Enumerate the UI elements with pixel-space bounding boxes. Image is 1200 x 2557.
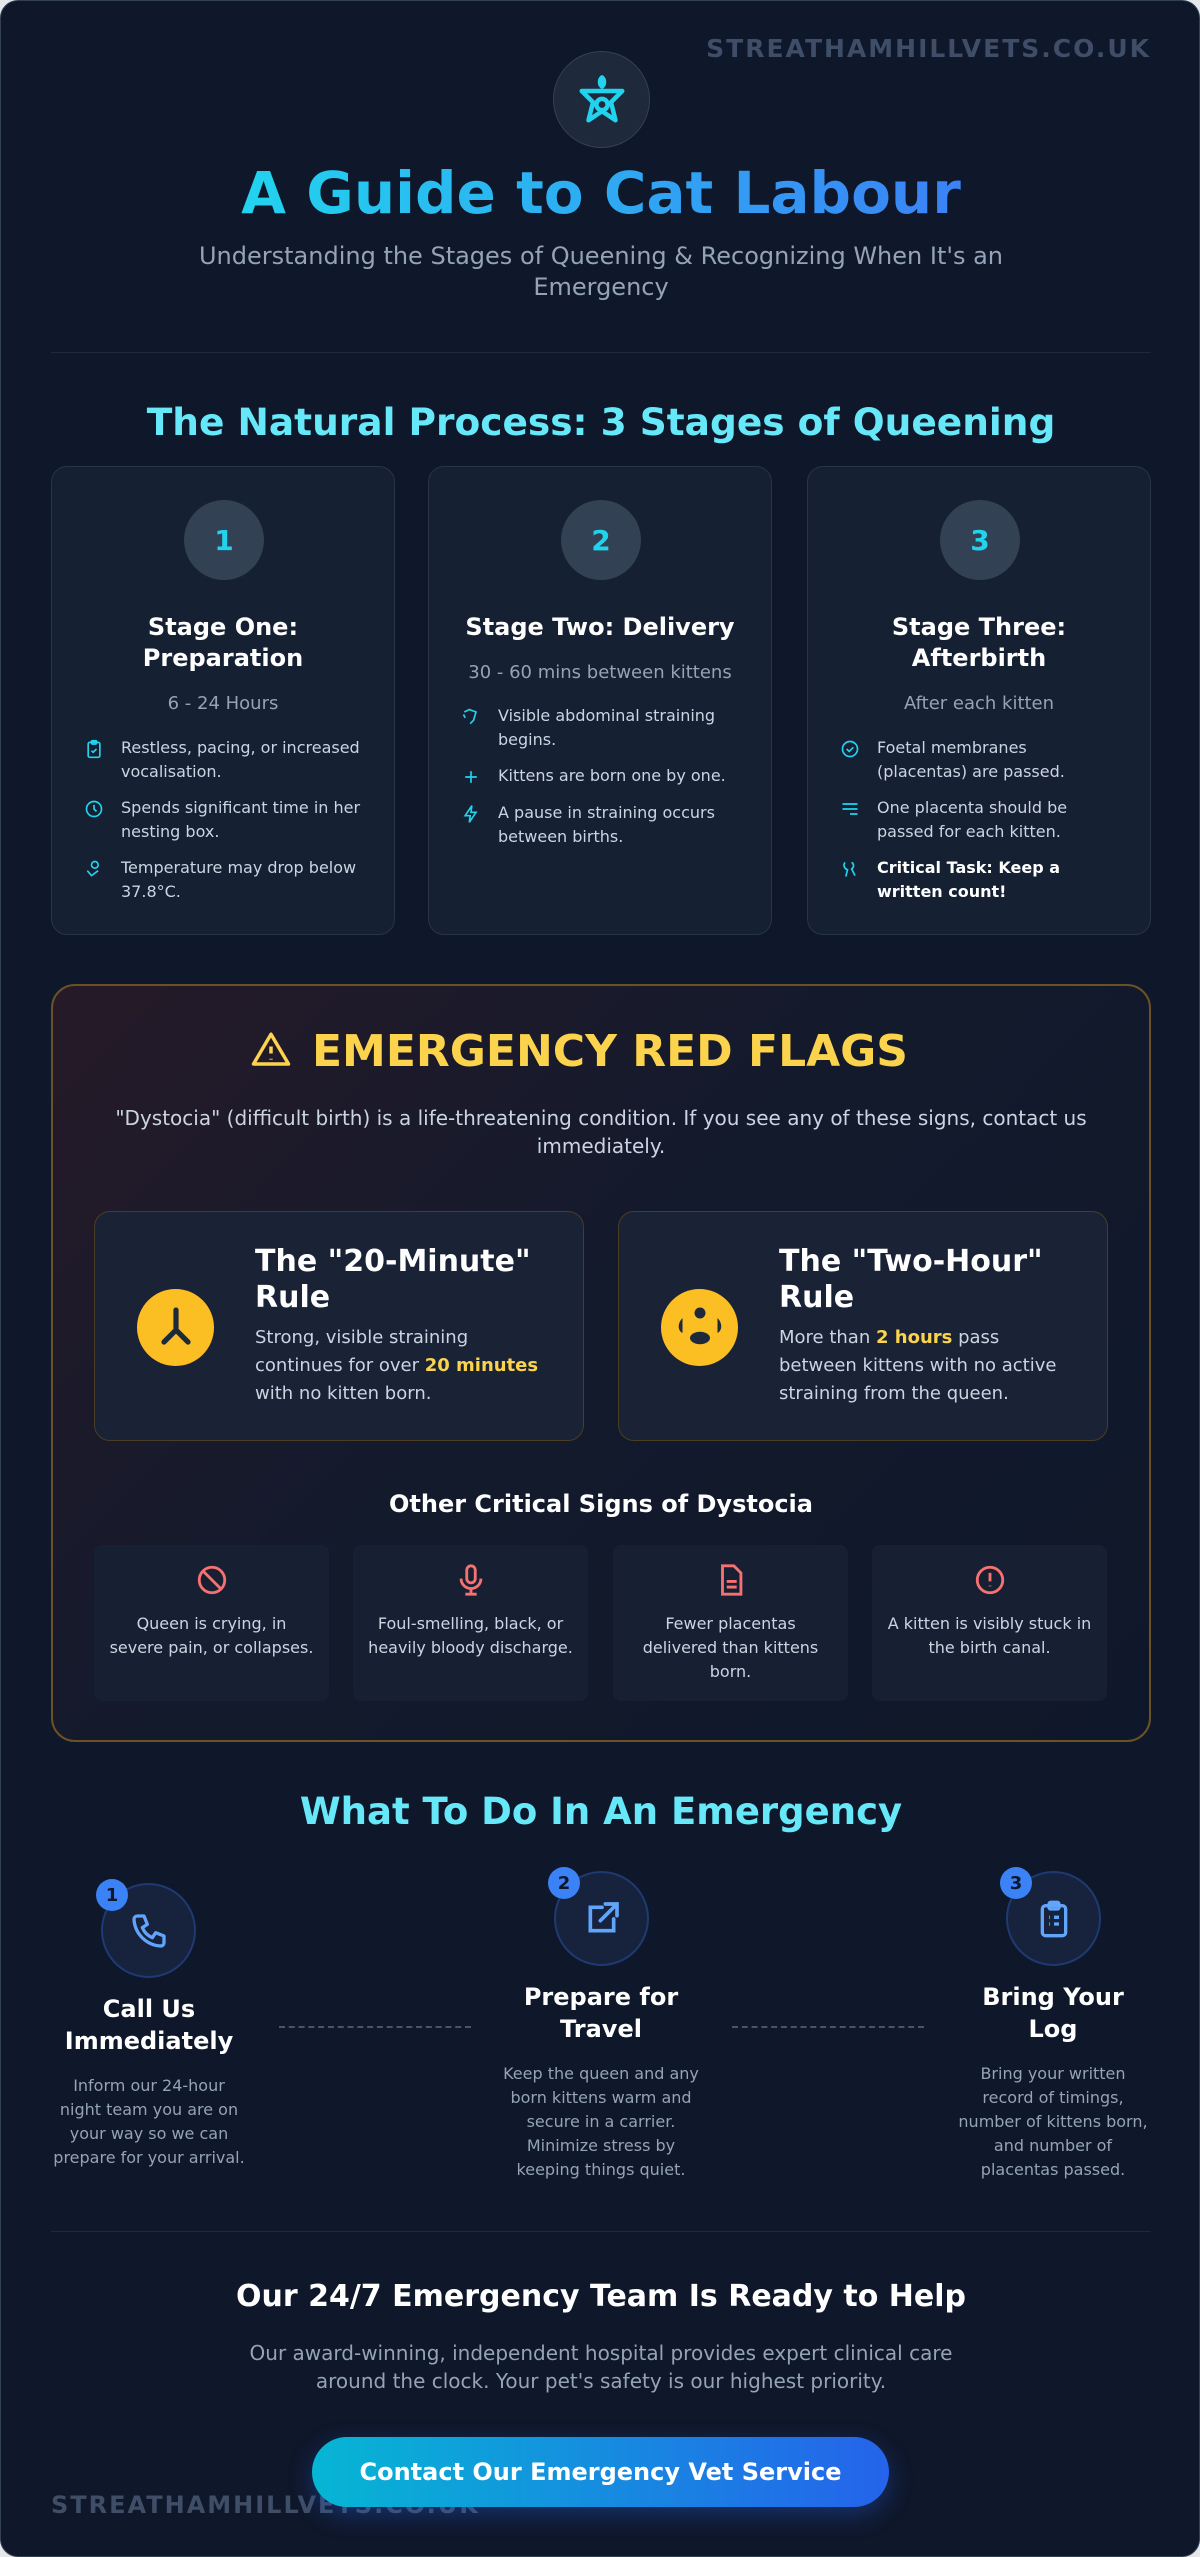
stage three title: Stage Three: — [892, 613, 1066, 641]
heading: natural process: The Natural Process: 3 Stages of Queening — [147, 400, 1055, 444]
rule card: two hour — [618, 1211, 1108, 1441]
number badge 2 — [561, 500, 641, 580]
icon: paw — [661, 1289, 738, 1366]
watermark top: STREATHAMHILLVETS.CO.UK — [706, 34, 1151, 63]
heading: other signs: Other Critical Signs of Dystocia — [389, 1490, 813, 1518]
list item: Visible abdominal straining begins. — [498, 706, 715, 749]
step 3: log: Bring Your — [982, 1983, 1124, 2011]
button: contact: Contact Our Emergency Vet Service — [359, 2458, 842, 2486]
step 1: call: Inform our 24-hour night team you are on your way so we can prepare for your arrival. — [53, 2076, 245, 2167]
subtitle: Understanding the Stages of Queening & Recognizing When It's an Emergency — [199, 242, 1003, 301]
sign card: crying — [94, 1545, 329, 1701]
sign card: stuck: A kitten is visibly stuck in the birth canal. — [888, 1614, 1091, 1657]
heading: what to do: What To Do In An Emergency — [300, 1790, 902, 1833]
heading: red flags: EMERGENCY RED FLAGS — [312, 1026, 908, 1077]
list item: One placenta should be passed for each kitten. — [877, 798, 1067, 841]
sign card: placentas — [613, 1545, 848, 1701]
step 1: call: Immediately — [65, 2027, 233, 2055]
number badge 1: 1 — [214, 524, 234, 556]
button: contact — [312, 2437, 889, 2507]
stage one title: Preparation — [143, 644, 303, 672]
stage one title: Stage One: — [148, 613, 298, 641]
stage two duration: 30 - 60 mins between kittens — [468, 662, 732, 683]
sign card: stuck — [872, 1545, 1107, 1701]
dystocia description: "Dystocia" (difficult birth) is a life-threatening condition. If you see any of these signs, contact us immediately. — [115, 1106, 1087, 1158]
step 2: travel: Travel — [560, 2015, 642, 2043]
step 3: log: Bring your written record of timings, number of kittens born, and number of placentas passed. — [958, 2064, 1148, 2179]
number badge 3 — [940, 500, 1020, 580]
stage three timing: After each kitten — [904, 693, 1054, 714]
number badge 2: 2 — [591, 524, 611, 556]
rule desc: More than 2 hours pass between kittens with no active straining from the queen. — [779, 1327, 1056, 1404]
step 2: travel: 2 — [558, 1872, 570, 1894]
stage three title — [892, 613, 1066, 672]
icon: cat star — [553, 51, 650, 148]
number badge 3: 3 — [970, 524, 990, 556]
list item: Spends significant time in her nesting box. — [121, 798, 360, 841]
arrow: dashed connector — [279, 2026, 471, 2028]
title: A Guide to Cat Labour — [241, 159, 961, 227]
watermark bottom: STREATHAMHILLVETS.CO.UK — [51, 2491, 480, 2519]
icon: strain — [137, 1289, 214, 1366]
number badge 1 — [184, 500, 264, 580]
stage one duration: 6 - 24 Hours — [168, 693, 278, 714]
panel: stage three — [807, 466, 1151, 935]
heading: 24/7 team: Our 24/7 Emergency Team Is Ready to Help — [236, 2279, 966, 2314]
step 3: log: 3 — [1010, 1872, 1022, 1894]
stage one title — [143, 613, 303, 672]
step 1: call — [53, 1879, 245, 2167]
step 3: log — [958, 1867, 1148, 2179]
rule title: The "Two-Hour" Rule — [779, 1244, 1043, 1315]
list item: Kittens are born one by one. — [498, 766, 726, 785]
step 3: log: Log — [1029, 2015, 1077, 2043]
list item: critical: Critical Task: Keep a written count! — [877, 858, 1060, 901]
step 1: call: 1 — [106, 1884, 118, 1906]
sign card: placentas: Fewer placentas delivered than kittens born. — [643, 1614, 818, 1681]
panel: stage two — [428, 466, 772, 935]
text: hospital description: Our award-winning, independent hospital provides expert clinical care around the clock. Your pet's safety is our highest priority. — [250, 2341, 952, 2393]
sign card: discharge — [353, 1545, 588, 1701]
panel: stage one — [51, 466, 395, 935]
panel: emergency red flags — [51, 984, 1151, 1742]
rule card: 20 minute — [94, 1211, 584, 1441]
sign card: crying: Queen is crying, in severe pain, or collapses. — [110, 1614, 313, 1657]
step 1: call: Call Us — [103, 1995, 195, 2023]
rule title: The "20-Minute" Rule — [255, 1244, 531, 1315]
arrow: dashed connector — [732, 2026, 924, 2028]
list item: Temperature may drop below 37.8°C. — [121, 858, 356, 901]
rule desc: Strong, visible straining continues for over 20 minutes with no kitten born. — [255, 1327, 538, 1404]
list item: A pause in straining occurs between births. — [498, 803, 715, 846]
step 2: travel — [503, 1867, 699, 2179]
list item: Restless, pacing, or increased vocalisation. — [121, 738, 360, 781]
step 2: travel: Prepare for — [524, 1983, 678, 2011]
list item: Foetal membranes (placentas) are passed. — [877, 738, 1065, 781]
stage two title: Stage Two: Delivery — [465, 613, 735, 641]
step 2: travel: Keep the queen and any born kittens warm and secure in a carrier. Minimize stress by keeping things quiet. — [503, 2064, 699, 2179]
sign card: discharge: Foul-smelling, black, or heavily bloody discharge. — [368, 1614, 573, 1657]
stage three title: Afterbirth — [912, 644, 1046, 672]
